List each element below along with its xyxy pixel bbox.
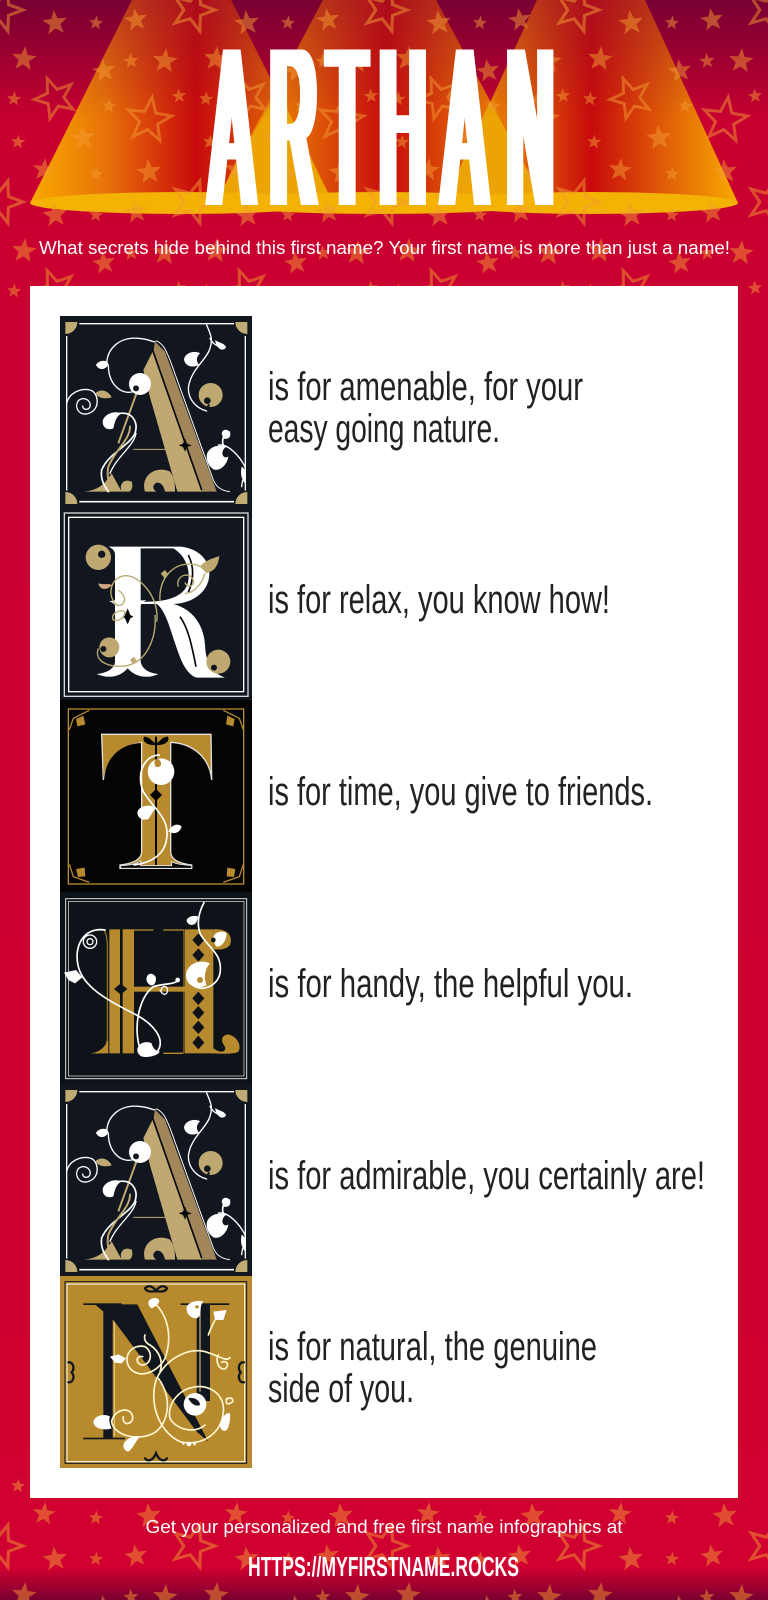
letter tile: H: [60, 892, 252, 1084]
letter tile: N: [60, 1276, 252, 1468]
letter tile: T: [60, 700, 252, 892]
footer url: HTTPS://MYFIRSTNAME.ROCKS: [248, 1551, 519, 1582]
spotlight pool: left: [30, 192, 333, 214]
spotlight pool: right: [444, 192, 738, 214]
title: ARTHAN: [211, 2, 553, 254]
spotlight: middle: [215, 0, 545, 203]
spotlight: left: [30, 0, 333, 203]
star pattern: footer: [0, 1472, 768, 1600]
text: N: [268, 1325, 597, 1411]
spotlight overlap: right: [444, 101, 545, 203]
letter tile: A (second): [60, 1084, 252, 1276]
spotlight pool: middle: [215, 192, 545, 214]
panel: letters: [30, 286, 738, 1498]
star pattern: header: [0, 0, 768, 300]
spotlights: [0, 0, 768, 214]
text: N: is for natural, the genuine: [268, 1325, 597, 1369]
spotlight: right: [444, 0, 738, 203]
spotlight overlap: left: [215, 90, 333, 203]
footer text: Get your personalized and free first name infographics at: [146, 1517, 622, 1537]
letter tile: R: [60, 508, 252, 700]
spotlight top shade: [82, 0, 690, 103]
text: H: is for handy, the helpful you.: [268, 962, 633, 1006]
text: A: [268, 365, 583, 451]
subtitle: What secrets hide behind this first name? Your first name is more than just a name!: [39, 238, 730, 258]
text: N: side of you.: [268, 1367, 414, 1411]
letter tile: A: [60, 316, 252, 508]
text: R: is for relax, you know how!: [268, 578, 610, 622]
text: A: is for amenable, for your: [268, 365, 583, 409]
text: A: easy going nature.: [268, 407, 500, 451]
